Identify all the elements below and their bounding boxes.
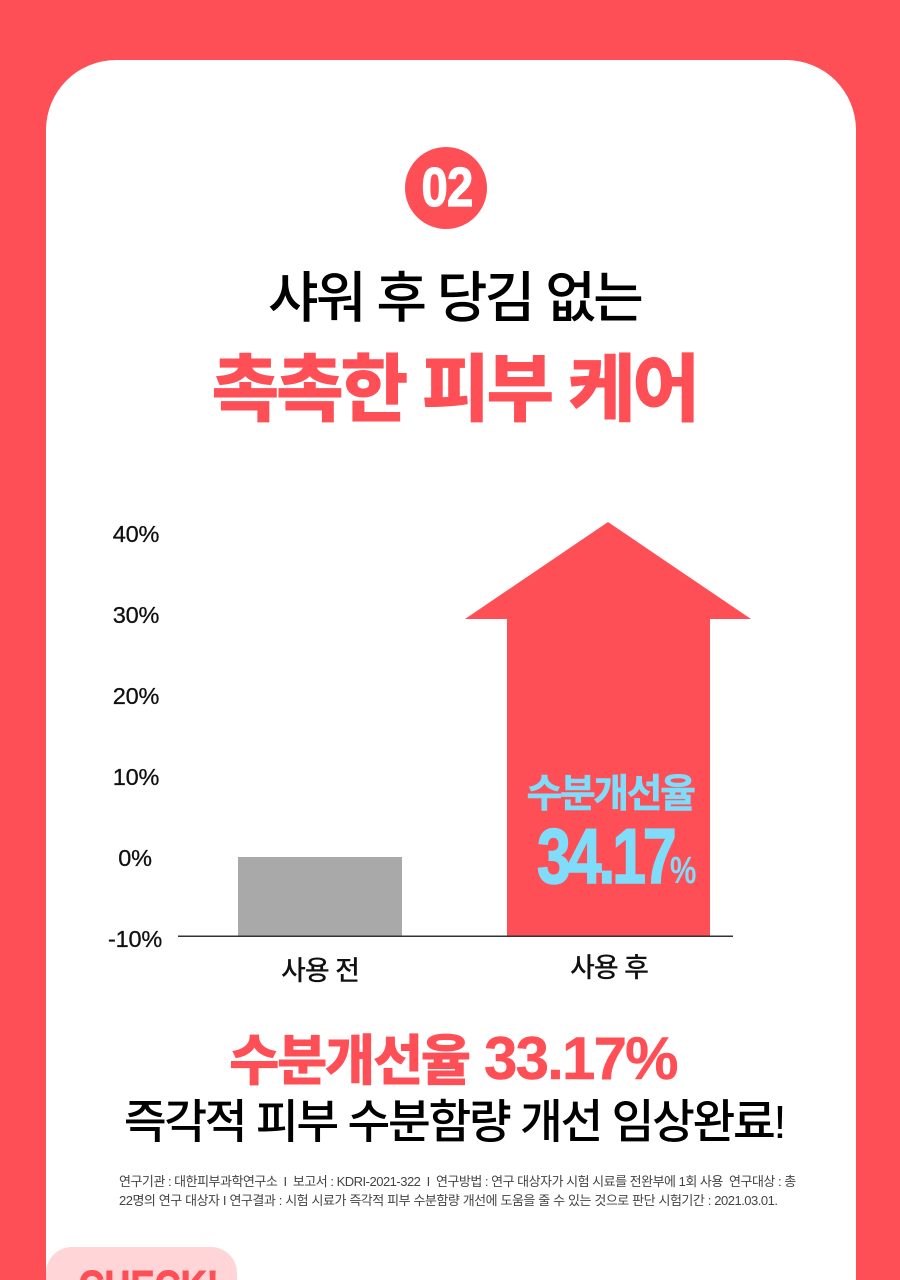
- footnote: 22명의 연구 대상자 I 연구결과 : 시험 시료가 즉각적 피부 수분함량 개선에 도움을 줄 수 있는 것으로 판단 시험기간 : 2021.03.01.: [119, 1193, 777, 1208]
- check tag: [46, 1247, 237, 1280]
- heading line 2: 촉촉한 피부 케어: [211, 348, 697, 431]
- y axis labels: 0%: [118, 845, 152, 871]
- bar chart: [108, 521, 751, 986]
- result headline: [229, 1025, 678, 1092]
- result subheadline: 즉각적 피부 수분함량 개선 임상완료!: [124, 1096, 784, 1148]
- footnote: [119, 1174, 796, 1208]
- number badge: 02: [422, 156, 472, 218]
- arrow value: %: [670, 850, 696, 892]
- arrow label: 수분개선율: [527, 773, 693, 816]
- y axis labels: 30%: [113, 602, 159, 628]
- y axis labels: 20%: [113, 683, 159, 709]
- y axis labels: -10%: [108, 926, 162, 952]
- axis baseline: [178, 936, 733, 937]
- y axis labels: 40%: [113, 521, 159, 547]
- footnote: 연구기관 : 대한피부과학연구소 I 보고서 : KDRI-2021-322 I 연구방법 : 연구 대상자가 시험 시료를 전완부에 1회 사용 연구대상 : 총: [119, 1174, 796, 1189]
- arrow value: 34.17: [537, 812, 674, 900]
- y axis labels: 10%: [113, 764, 159, 790]
- x label: before: 사용 전: [281, 956, 359, 986]
- bar: before use: [238, 857, 402, 936]
- number badge: [405, 147, 487, 229]
- result headline: 33.17%: [484, 1025, 677, 1092]
- heading line 1: 샤워 후 당김 없는: [268, 267, 641, 329]
- y axis labels: [108, 521, 162, 952]
- arrow: after use: [465, 522, 751, 936]
- result headline: 수분개선율: [229, 1030, 469, 1092]
- x label: after: 사용 후: [570, 953, 648, 983]
